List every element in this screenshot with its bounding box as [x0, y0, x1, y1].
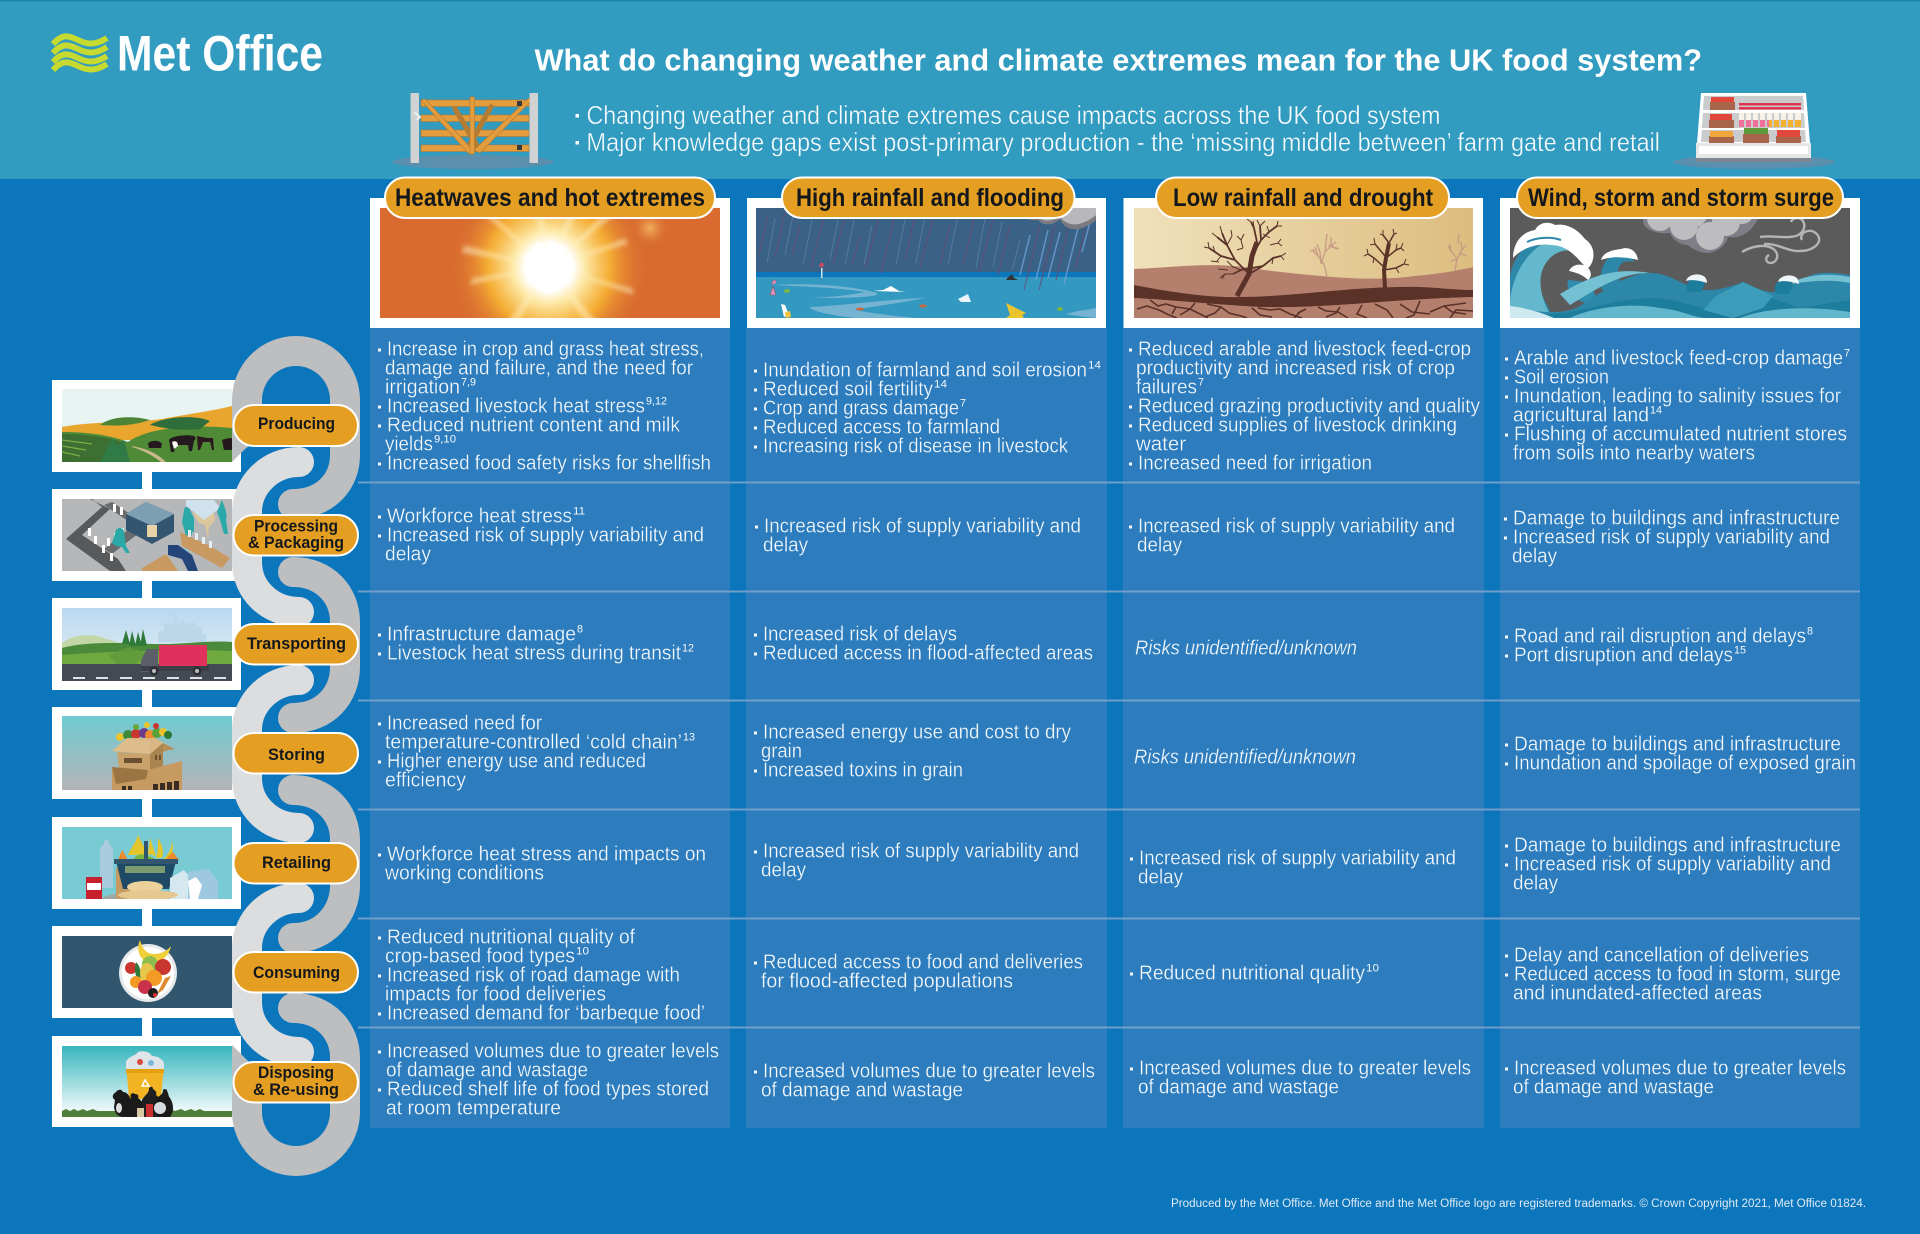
- text: drought, producing: Reduced grazing productivity and quality: [1138, 396, 1480, 418]
- text: drought, processing: delay: [1137, 534, 1182, 556]
- icon: retail chiller cabinet: [1673, 93, 1835, 169]
- text: drought, transporting: Risks unidentified/unknown: [1135, 638, 1357, 660]
- text: drought, producing: failures: [1136, 376, 1197, 398]
- text: heat, consuming: Increased demand for ‘barbeque food’: [387, 1002, 705, 1024]
- text: flood, producing: Reduced soil fertility: [763, 378, 933, 400]
- wind curls: [1742, 218, 1819, 263]
- text: heat, consuming: impacts for food deliveries: [385, 984, 606, 1006]
- panel: rows background: [358, 328, 1860, 1128]
- text: heat, retailing: Workforce heat stress and impacts on: [387, 844, 706, 866]
- sea: [1534, 272, 1850, 314]
- text: storm, producing: Arable and livestock feed-crop damage: [1514, 348, 1843, 370]
- text: drought, disposing: [1130, 1058, 1471, 1098]
- intro bullet text: Changing weather and climate extremes cause impacts across the UK food system: [586, 100, 1440, 130]
- stage label: Processing and Packaging: Processing: [254, 516, 338, 536]
- text: storm, storing: Inundation and spoilage of exposed grain: [1514, 752, 1856, 774]
- panel: flooding image card: [747, 178, 1106, 328]
- panel: heatwaves image card: [370, 176, 730, 328]
- stage image: transporting: [52, 598, 241, 690]
- text: flood, producing: 14: [934, 378, 947, 390]
- heading: flooding: [782, 178, 1074, 218]
- text: flood, producing: [754, 360, 1101, 458]
- text: flood, producing: Crop and grass damage: [763, 398, 959, 420]
- text: drought, disposing: of damage and wastage: [1138, 1076, 1339, 1098]
- text: storm, producing: [1505, 348, 1850, 464]
- text: heat, disposing: at room temperature: [386, 1098, 561, 1120]
- text: heat, retailing: [378, 844, 706, 884]
- text: storm, consuming: Delay and cancellation of deliveries: [1514, 944, 1809, 966]
- text: heat, retailing: working conditions: [384, 862, 544, 884]
- text: heat, disposing: Increased volumes due to greater levels: [387, 1040, 719, 1062]
- stage label: Disposing and Re-using: [234, 1062, 358, 1102]
- text: storm, producing: from soils into nearby waters: [1513, 442, 1755, 464]
- text: flood, processing: delay: [763, 534, 808, 556]
- icon: logo waves: [53, 36, 107, 70]
- text: flood, disposing: Increased volumes due to greater levels: [763, 1060, 1095, 1082]
- text: flood, retailing: Increased risk of supply variability and: [763, 840, 1079, 862]
- text: flood, producing: Reduced access to farmland: [763, 416, 1000, 438]
- text: heat, processing: Increased risk of supply variability and: [387, 524, 704, 546]
- text: flood, retailing: [754, 840, 1079, 882]
- text: heat, processing: Workforce heat stress: [387, 506, 572, 528]
- stage image: disposing and re-using: [52, 1036, 241, 1127]
- text: drought, retailing: delay: [1138, 866, 1183, 888]
- text: heat, processing: [378, 506, 704, 566]
- text: heat, storing: [378, 712, 695, 792]
- text: flood, producing: 14: [1088, 360, 1101, 372]
- text: heat, transporting: 12: [682, 642, 694, 654]
- logo: Met Office: [53, 26, 323, 82]
- intro bullet text: Major knowledge gaps exist post-primary production - the ‘missing middle between’ farm gate and retail: [586, 127, 1660, 157]
- heading: heatwaves: [385, 178, 715, 218]
- text: storm, producing: Soil erosion: [1514, 366, 1609, 388]
- heading: storm: Wind, storm and storm surge: [1528, 184, 1834, 212]
- text: storm, retailing: [1505, 834, 1841, 894]
- text: storm, processing: Damage to buildings and infrastructure: [1513, 508, 1840, 530]
- heading: drought: [1156, 178, 1449, 218]
- tree: large: [1204, 219, 1286, 296]
- text: drought, producing: [1129, 338, 1480, 474]
- stage label: Producing: Producing: [258, 414, 335, 433]
- text: storm, disposing: [1505, 1058, 1846, 1098]
- text: heat, storing: 13: [683, 732, 695, 744]
- text: heat, producing: 9,12: [646, 396, 667, 408]
- text: drought, processing: [1129, 516, 1455, 556]
- text: heat, producing: Increased livestock heat stress: [387, 396, 645, 418]
- text: storm, processing: Increased risk of supply variability and: [1513, 526, 1830, 548]
- text: storm, transporting: [1505, 626, 1813, 666]
- text: heat, producing: Increased food safety risks for shellfish: [387, 452, 711, 474]
- heading: flooding: High rainfall and flooding: [796, 184, 1064, 212]
- text: flood, transporting: Increased risk of delays: [763, 624, 957, 646]
- text: storm, consuming: [1505, 944, 1841, 1004]
- text: heat, storing: Increased need for: [387, 712, 542, 734]
- text: storm, consuming: Reduced access to food in storm, surge: [1514, 964, 1841, 986]
- stage label: Processing and Packaging: & Packaging: [248, 533, 344, 552]
- text: drought, producing: Increased need for irrigation: [1138, 452, 1372, 474]
- text: drought, retailing: [1130, 848, 1456, 888]
- stage label: Transporting: Transporting: [247, 634, 346, 653]
- text: storm, retailing: Increased risk of supply variability and: [1514, 854, 1831, 876]
- text: heat, transporting: 8: [577, 624, 583, 636]
- heading: drought: Low rainfall and drought: [1173, 184, 1434, 212]
- stage label: Retailing: [234, 843, 358, 884]
- stage image: producing: [52, 380, 241, 472]
- text: heat, disposing: [378, 1040, 719, 1120]
- stage label: Processing and Packaging: [234, 515, 358, 556]
- text: heat, producing: damage and failure, and the need for: [385, 358, 693, 380]
- text: heat, storing: Higher energy use and reduced: [387, 750, 646, 772]
- logo: Met Office: Met Office: [117, 26, 323, 82]
- text: storm, disposing: Increased volumes due to greater levels: [1514, 1058, 1846, 1080]
- text: heat, producing: Increase in crop and grass heat stress,: [387, 338, 704, 360]
- panel: storm image card: [1500, 178, 1860, 328]
- text: heat, producing: 9,10: [434, 434, 456, 446]
- text: drought, producing: Reduced supplies of livestock drinking: [1138, 414, 1457, 436]
- storm cloud: [1642, 219, 1758, 253]
- text: heat, consuming: [378, 926, 705, 1024]
- tree: distant: [1310, 234, 1467, 276]
- text: drought, storing: Risks unidentified/unknown: [1134, 746, 1356, 768]
- text: flood, producing: Inundation of farmland and soil erosion: [763, 360, 1087, 382]
- text: heat, processing: 11: [573, 506, 585, 518]
- text: flood, consuming: [754, 952, 1083, 992]
- text: heat, producing: yields: [385, 434, 433, 456]
- text: heat, producing: Reduced nutrient content and milk: [387, 414, 681, 436]
- wave: second: [1600, 257, 1634, 290]
- stage label: Disposing and Re-using: & Re-using: [253, 1080, 339, 1099]
- text: drought, disposing: Increased volumes due to greater levels: [1139, 1058, 1471, 1080]
- text: flood, consuming: Reduced access to food and deliveries: [763, 952, 1083, 974]
- title: What do changing weather and climate extremes mean for the UK food system?: [534, 42, 1702, 78]
- stage image: storing: [52, 707, 241, 799]
- stage label: Consuming: Consuming: [253, 963, 340, 982]
- stage label: Storing: Storing: [268, 745, 325, 764]
- stage image: retailing: [52, 817, 241, 909]
- footer credit: Produced by the Met Office. Met Office and the Met Office logo are registered trademarks. © Crown Copyright 2021, Met Office 01824.: [1171, 1198, 1866, 1210]
- stage label: Producing: [234, 405, 358, 446]
- text: storm, transporting: Road and rail disruption and delays: [1514, 626, 1806, 648]
- text: storm, storing: [1505, 734, 1856, 774]
- text: heat, consuming: 10: [576, 946, 589, 958]
- text: heat, consuming: Increased risk of road damage with: [387, 964, 680, 986]
- text: flood, producing: Increasing risk of disease in livestock: [763, 436, 1069, 458]
- stage label: Storing: [234, 733, 358, 774]
- text: storm, processing: [1504, 508, 1840, 568]
- text: flood, retailing: delay: [761, 860, 806, 882]
- text: drought, processing: Increased risk of supply variability and: [1138, 516, 1455, 538]
- text: storm, producing: 7: [1844, 348, 1850, 360]
- text: flood, processing: Increased risk of supply variability and: [764, 516, 1081, 538]
- text: flood, storing: Increased energy use and cost to dry: [763, 722, 1071, 744]
- text: flood, disposing: [754, 1060, 1095, 1102]
- stage image: consuming: [52, 926, 241, 1018]
- header band: [0, 0, 1920, 179]
- text: storm, processing: delay: [1512, 546, 1557, 568]
- text: drought, producing: water: [1135, 434, 1186, 456]
- text: heat, consuming: Reduced nutritional quality of: [387, 926, 635, 948]
- icon: farm gate: [392, 93, 554, 169]
- text: drought, producing: Reduced arable and livestock feed-crop: [1138, 338, 1471, 360]
- text: storm, producing: 14: [1650, 404, 1662, 416]
- text: flood, processing: [755, 516, 1081, 556]
- connectors between stage cards: [142, 472, 152, 1036]
- text: drought, retailing: Increased risk of supply variability and: [1139, 848, 1456, 870]
- text: flood, transporting: Reduced access in flood-affected areas: [763, 642, 1093, 664]
- text: flood, storing: [754, 722, 1071, 782]
- text: drought, producing: productivity and increased risk of crop: [1136, 358, 1455, 380]
- text: storm, producing: Inundation, leading to salinity issues for: [1514, 386, 1841, 408]
- text: heat, disposing: Reduced shelf life of food types stored: [387, 1078, 709, 1100]
- text: drought, consuming: Reduced nutritional quality: [1139, 962, 1365, 984]
- intro bullet text: [576, 100, 1660, 157]
- text: storm, consuming: and inundated-affected areas: [1513, 982, 1762, 1004]
- text: heat, producing: 7,9: [461, 376, 476, 388]
- text: heat, transporting: Infrastructure damage: [387, 624, 576, 646]
- cardboard boxes: [117, 743, 163, 770]
- text: flood, transporting: [754, 624, 1093, 664]
- text: storm, transporting: 15: [1734, 644, 1746, 656]
- text: storm, retailing: Damage to buildings and infrastructure: [1514, 834, 1841, 856]
- stage label: Disposing and Re-using: Disposing: [258, 1063, 334, 1082]
- text: storm, producing: agricultural land: [1513, 404, 1649, 426]
- stage image: processing and packaging: [52, 489, 241, 581]
- text: flood, storing: grain: [761, 740, 802, 762]
- wave: big: [1510, 245, 1550, 312]
- text: flood, storing: Increased toxins in grain: [763, 760, 963, 782]
- text: storm, transporting: Port disruption and delays: [1514, 644, 1733, 666]
- heading: storm: [1517, 178, 1843, 218]
- panel: drought image card: [1124, 178, 1483, 328]
- text: flood, consuming: for flood-affected populations: [761, 970, 1013, 992]
- text: heat, transporting: Livestock heat stress during transit: [387, 642, 681, 664]
- text: heat, storing: efficiency: [385, 770, 466, 792]
- text: storm, transporting: 8: [1807, 626, 1813, 638]
- supply chain links: [232, 336, 360, 1176]
- text: heat, producing: [378, 338, 711, 474]
- text: storm, storing: Damage to buildings and infrastructure: [1514, 734, 1841, 756]
- text: drought, consuming: 10: [1366, 962, 1379, 974]
- text: drought, producing: 7: [1198, 376, 1204, 388]
- stage label: Retailing: Retailing: [262, 853, 331, 872]
- text: heat, disposing: of damage and wastage: [386, 1060, 588, 1082]
- text: storm, producing: Flushing of accumulated nutrient stores: [1514, 424, 1847, 446]
- heading: heatwaves: Heatwaves and hot extremes: [395, 184, 705, 212]
- text: heat, consuming: crop-based food types: [385, 946, 575, 968]
- text: heat, storing: temperature-controlled ‘cold chain’: [385, 732, 682, 754]
- text: heat, processing: delay: [385, 544, 431, 566]
- stage label: Transporting: [234, 624, 358, 664]
- text: storm, retailing: delay: [1513, 872, 1558, 894]
- text: flood, disposing: of damage and wastage: [761, 1080, 963, 1102]
- stage label: Consuming: [234, 952, 358, 992]
- text: storm, disposing: of damage and wastage: [1513, 1076, 1714, 1098]
- text: heat, transporting: [378, 624, 694, 664]
- text: heat, producing: irrigation: [385, 376, 460, 398]
- text: flood, producing: 7: [960, 398, 966, 410]
